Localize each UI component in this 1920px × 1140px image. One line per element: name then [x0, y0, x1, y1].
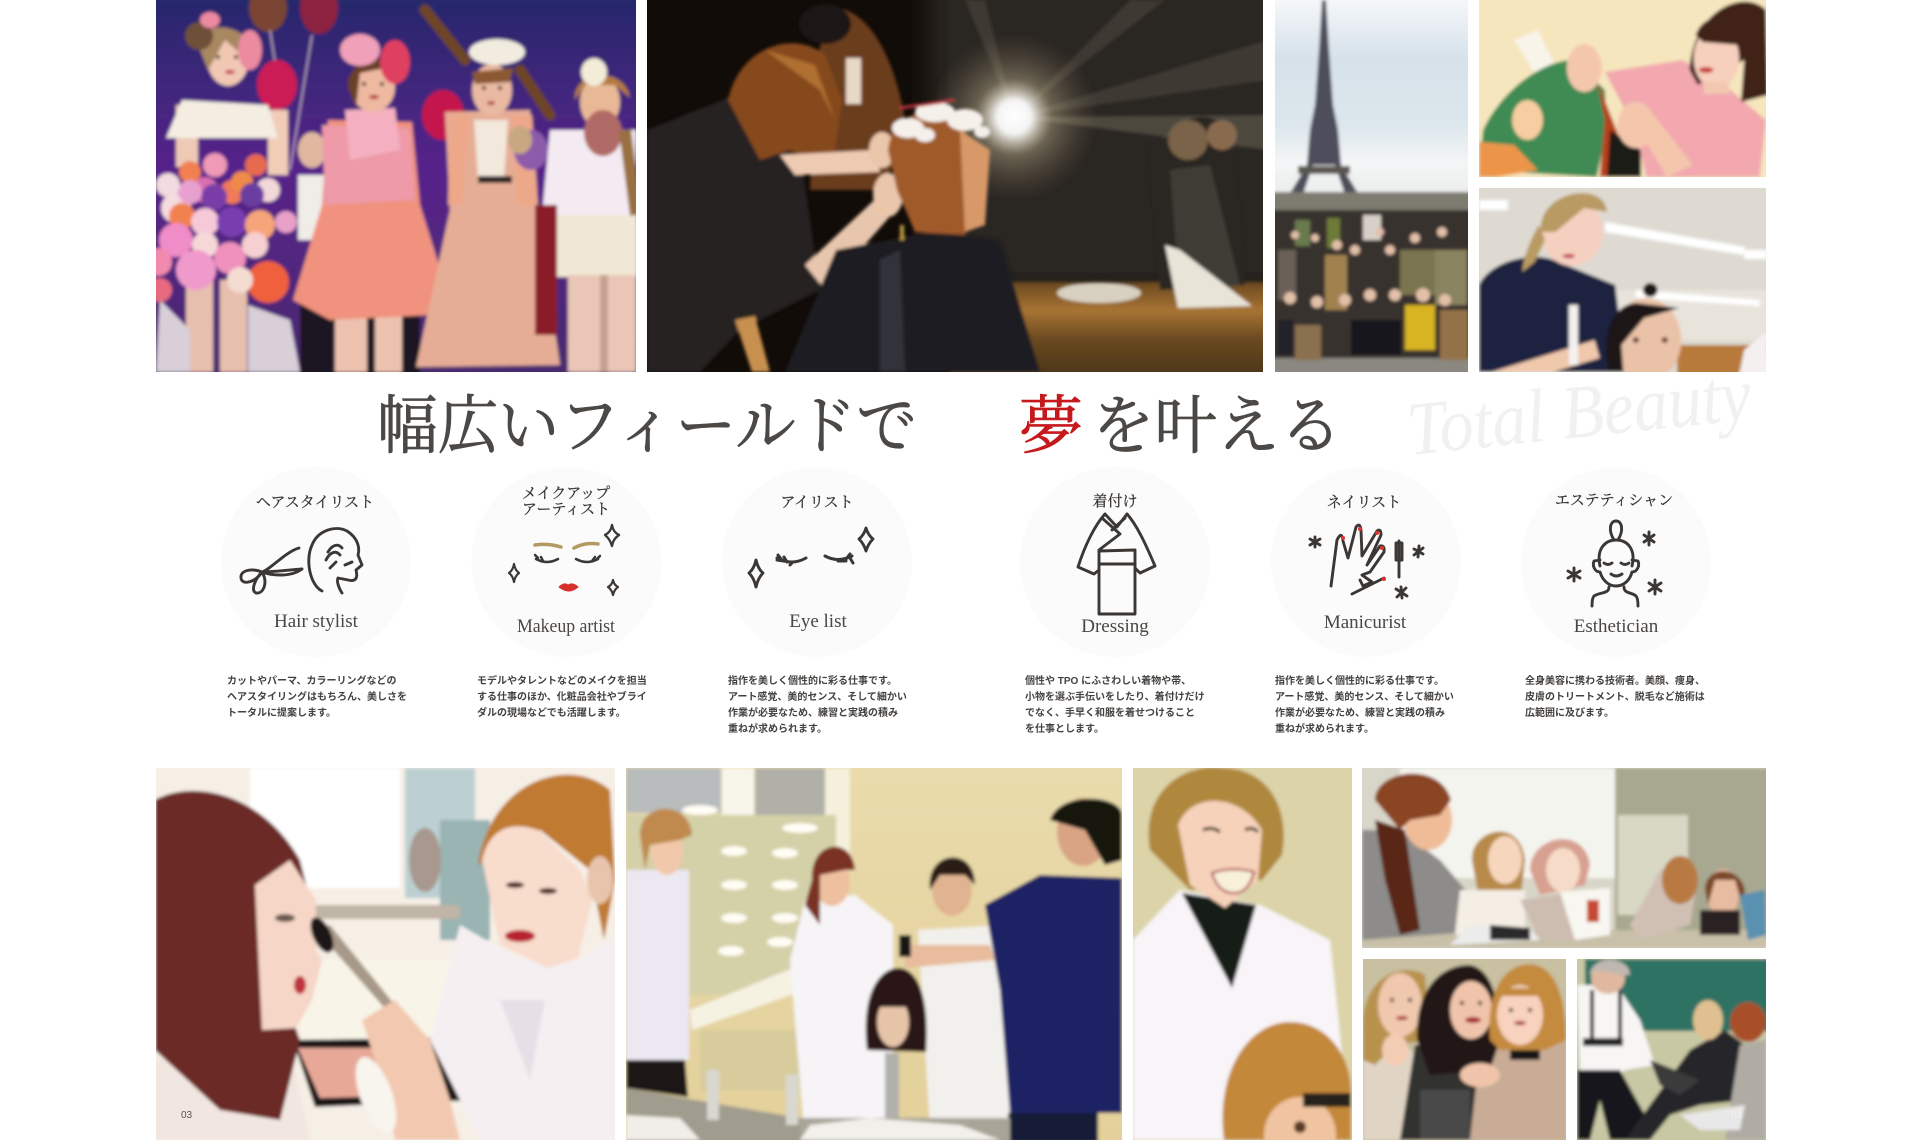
photo: student styling a mannequin [1479, 188, 1766, 372]
panel: dressing [1020, 467, 1210, 657]
text: manicurist description: 指作を美しく個性的に彩る仕事です。 [1275, 676, 1444, 687]
title: 幅広いフィールドで [377, 391, 917, 462]
panel: esthetician: エステティシャン [1555, 493, 1673, 509]
icon: face with bun [1568, 521, 1661, 606]
script: Total Beauty: Total Beauty [1403, 352, 1755, 472]
panel: makeup artist: アーティスト [522, 502, 610, 518]
text: makeup artist description: ダルの現場などでも活躍します。 [477, 706, 626, 719]
panel: esthetician: Esthetician [1574, 616, 1659, 637]
panel: makeup artist: Makeup artist [517, 616, 616, 637]
text: hair stylist description: ヘアスタイリングはもちろん、美しさを [227, 690, 407, 703]
title [377, 391, 1342, 462]
text: eye list description: アート感覚、美的センス、そして細かい [728, 690, 907, 703]
photo: student dressing a kimono [1471, 0, 1770, 180]
icon: kimono [1078, 514, 1155, 614]
photo: makeup application [150, 760, 620, 1140]
panel: eye list: Eye list [789, 611, 847, 632]
text: makeup artist description: モデルやタレントなどのメイクを担当 [477, 676, 647, 687]
text: manicurist description: アート感覚、美的センス、そして細かい [1275, 690, 1454, 703]
photo: hairdressing on stage with spotlight [640, 0, 1290, 380]
text: esthetician description: 広範囲に及びます。 [1525, 706, 1614, 719]
panel: hair stylist: Hair stylist [274, 611, 359, 632]
icon: made-up face [509, 525, 619, 595]
page number 03: 03 [181, 1110, 193, 1121]
text: hair stylist description: カットやパーマ、カラーリングなどの [227, 676, 396, 687]
panel: eye list [722, 467, 912, 657]
panel: dressing: Dressing [1081, 616, 1149, 637]
text: esthetician description: 全身美容に携わる技術者。美顔、痩身、 [1525, 676, 1705, 687]
photo: students reading magazines at a table [1358, 762, 1770, 952]
text: manicurist description: 作業が必要なため、練習と実践の積み [1275, 706, 1445, 719]
title: を叶える [1092, 391, 1342, 462]
text: dressing description: を仕事とします。 [1025, 722, 1104, 735]
text: eye list description: 重ねが求められます。 [728, 722, 827, 735]
title: 夢 [1019, 391, 1083, 462]
panel: makeup artist: メイクアップ [522, 485, 610, 502]
panel: manicurist: ネイリスト [1327, 494, 1401, 511]
text: hair stylist description: トータルに提案します。 [227, 706, 336, 719]
text: makeup artist description: する仕事のほか、化粧品会社やブライ [477, 690, 647, 703]
panel: makeup artist [472, 467, 662, 657]
panel: esthetician [1521, 467, 1711, 657]
panel: manicurist: Manicurist [1324, 612, 1407, 633]
photo: students with blackboard [1574, 955, 1770, 1140]
page number 04: 04 [1731, 1110, 1743, 1121]
text: eye list description: 指作を美しく個性的に彩る仕事です。 [728, 676, 897, 687]
panel: dressing: 着付け [1092, 493, 1138, 510]
text: eye list description: 作業が必要なため、練習と実践の積み [728, 706, 898, 719]
icon: eyelashes and sparkles [749, 528, 873, 587]
photo: smiling student with mannequin [1130, 760, 1355, 1140]
panel: hair stylist: ヘアスタイリスト [256, 494, 374, 511]
icon: scissors and head [241, 529, 362, 593]
panel: manicurist [1271, 467, 1461, 657]
panel: hair stylist [221, 467, 411, 657]
photo: group at the Eiffel Tower [1265, 0, 1475, 375]
icon: red nails [1341, 527, 1386, 581]
text: esthetician description: 皮膚のトリートメント、脱毛など施術は [1525, 690, 1705, 703]
text: dressing description: でなく、手早く和服を着せつけること [1025, 706, 1195, 719]
photo: three students posing [1360, 955, 1570, 1140]
text: manicurist description: 重ねが求められます。 [1275, 722, 1374, 735]
text: dressing description: 個性や TPO にふさわしい着物や帯、 [1025, 676, 1191, 687]
panel: eye list: アイリスト [780, 495, 854, 511]
photo: classroom demonstration with wig [620, 760, 1130, 1140]
icon: hand with painted nails [1310, 525, 1423, 598]
text: dressing description: 小物を選ぶ手伝いをしたり、着付けだけ [1025, 690, 1205, 703]
photo: stage models with balloons [144, 0, 642, 377]
